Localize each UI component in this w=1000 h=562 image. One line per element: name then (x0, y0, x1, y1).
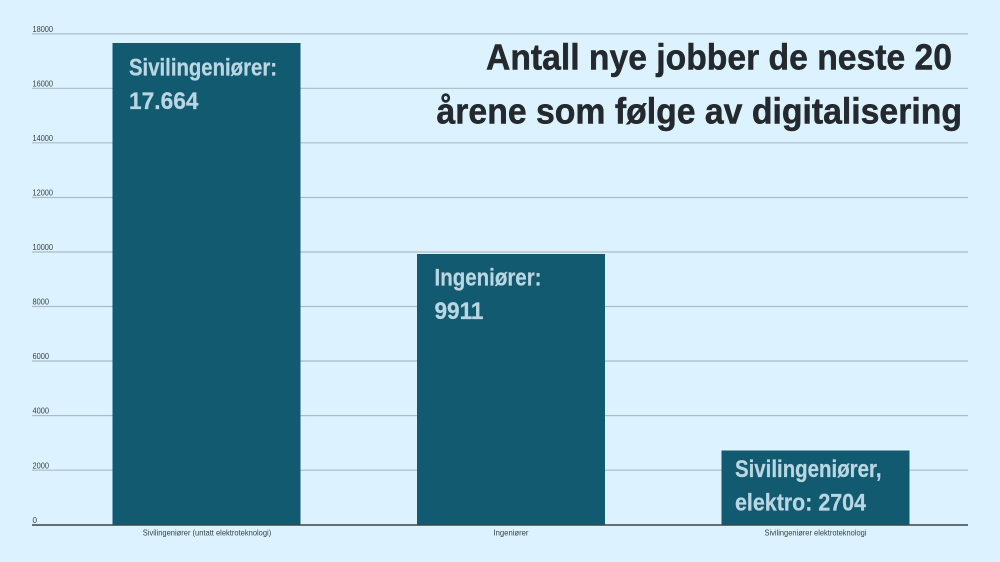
bar: Sivilingeniører, elektro 2704 (722, 450, 910, 525)
x-axis category labels: Ingeniører (494, 528, 529, 538)
y-axis labels: 16000 (32, 80, 54, 88)
title: Antall nye jobber de neste 20 (486, 36, 952, 78)
y-axis labels: 4000 (32, 406, 50, 416)
title (436, 36, 962, 132)
y-axis labels: 14000 (32, 134, 54, 143)
y-axis labels: 18000 (32, 25, 54, 34)
bar: Sivilingeniører, elektro 2704: elektro: 2704 (735, 490, 867, 516)
bar: Ingeniører 9911: 9911 (434, 298, 484, 325)
y-axis labels: 12000 (32, 188, 54, 198)
y-axis labels: 10000 (32, 243, 54, 252)
bar: Sivilingeniører, elektro 2704: Sivilingeniører, (735, 456, 882, 483)
y-axis labels: 6000 (32, 352, 50, 361)
y-axis labels: 0 (32, 516, 38, 525)
bar: Sivilingeniører 17.664: 17.664 (129, 88, 199, 115)
y-axis labels: 8000 (32, 298, 50, 306)
y-axis labels: 2000 (32, 462, 50, 470)
title: årene som følge av digitalisering (436, 90, 962, 132)
x-axis category labels: Sivilingeniører elektroteknologi (764, 528, 867, 538)
y-axis labels (32, 25, 54, 525)
bar: Ingeniører 9911 (417, 254, 605, 525)
bar: Sivilingeniører 17.664: Sivilingeniører: (129, 54, 277, 82)
x-axis category labels (143, 528, 867, 538)
bar: Ingeniører 9911: Ingeniører: (434, 264, 542, 292)
bar: Sivilingeniører 17.664 (112, 43, 300, 525)
x-axis category labels: Sivilingeniører (untatt elektroteknologi) (143, 528, 272, 538)
